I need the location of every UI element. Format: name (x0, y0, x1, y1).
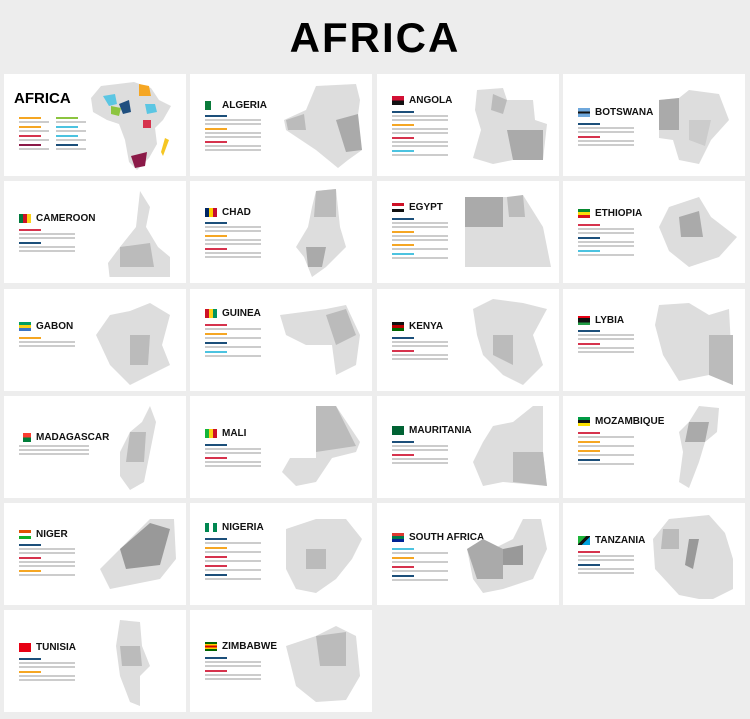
panel: nigeria (190, 503, 372, 605)
panel: nigeria: NIGERIA (222, 522, 264, 533)
panel: chad (190, 181, 372, 283)
panel: mali: MALI (222, 428, 246, 439)
panel: ethiopia: ETHIOPIA (595, 208, 642, 219)
panel: mozambique (563, 396, 745, 498)
panel: south africa: SOUTH AFRICA (409, 532, 484, 543)
panel: madagascar (4, 396, 186, 498)
panel: mozambique: MOZAMBIQUE (595, 416, 664, 427)
panel: africa overview: AFRICA (14, 90, 71, 107)
panel: gabon: GABON (36, 321, 73, 332)
panel: madagascar: MADAGASCAR (36, 432, 109, 443)
panel: egypt: EGYPT (409, 202, 443, 213)
panel: angola (377, 74, 559, 176)
panel: ethiopia (563, 181, 745, 283)
panel: guinea (190, 289, 372, 391)
panel: niger (4, 503, 186, 605)
panel: kenya: KENYA (409, 321, 443, 332)
panel: lybia: LYBIA (595, 315, 624, 326)
panel: tunisia: TUNISIA (36, 642, 76, 653)
panel: tanzania (563, 503, 745, 605)
panel: africa overview (4, 74, 186, 176)
panel: algeria: ALGERIA (222, 100, 267, 111)
panel: kenya (377, 289, 559, 391)
panel: algeria (190, 74, 372, 176)
panel: zimbabwe (190, 610, 372, 712)
panel: guinea: GUINEA (222, 308, 261, 319)
panel: gabon (4, 289, 186, 391)
panel: south africa (377, 503, 559, 605)
panel: angola: ANGOLA (409, 95, 452, 106)
panel: niger: NIGER (36, 529, 68, 540)
panel: cameroon (4, 181, 186, 283)
panel: lybia (563, 289, 745, 391)
panel: mauritania (377, 396, 559, 498)
panel: botswana (563, 74, 745, 176)
panel: chad: CHAD (222, 207, 251, 218)
panel: egypt (377, 181, 559, 283)
panel: botswana: BOTSWANA (595, 107, 653, 118)
panel: tanzania: TANZANIA (595, 535, 645, 546)
panel: zimbabwe: ZIMBABWE (222, 641, 277, 652)
panel: mauritania: MAURITANIA (409, 425, 472, 436)
panel: cameroon: CAMEROON (36, 213, 95, 224)
title: AFRICA (290, 14, 460, 61)
panel: tunisia (4, 610, 186, 712)
panel: mali (190, 396, 372, 498)
